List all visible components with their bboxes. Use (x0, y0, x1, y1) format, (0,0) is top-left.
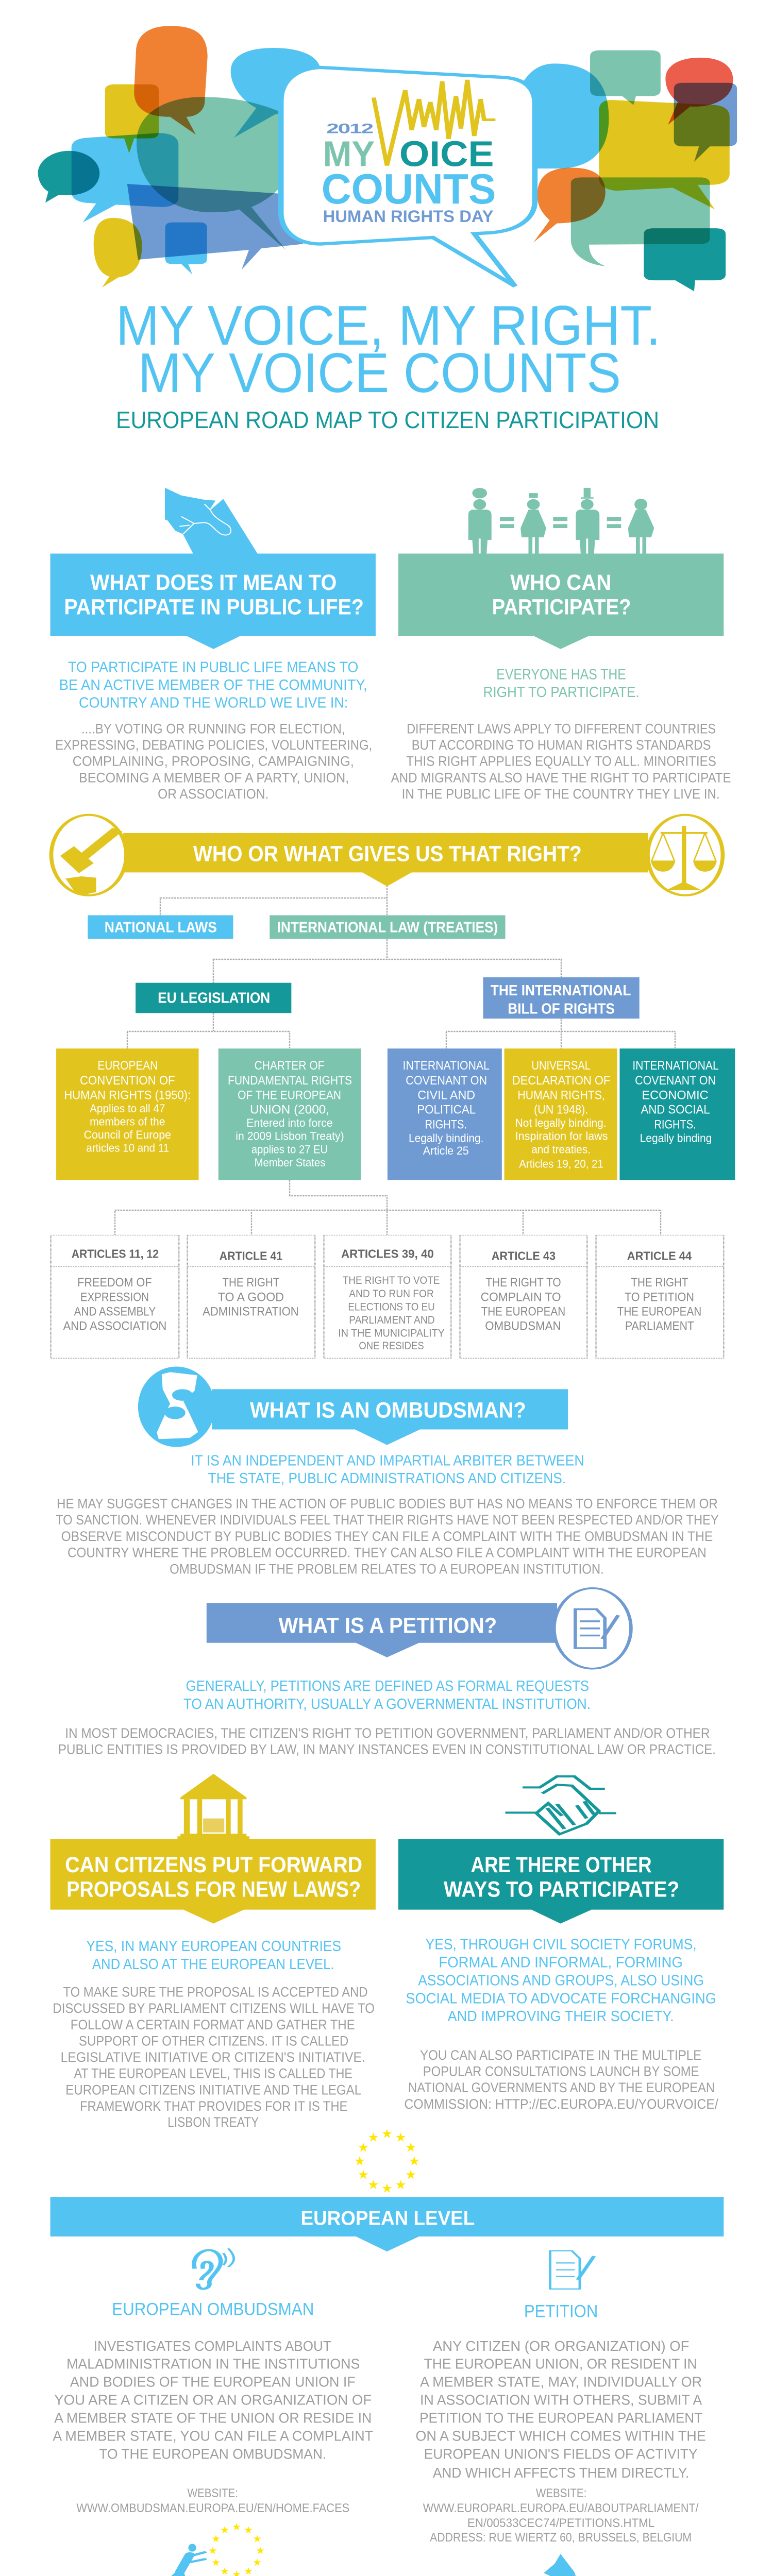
box: EU legislation: EU LEGISLATION (158, 990, 270, 1006)
card: charter of fundamental rights (219, 1048, 361, 1180)
card: charter of fundamental rights: Member States (255, 1156, 325, 1168)
panel: who can participate (391, 488, 731, 802)
card: covenant on economic and social rights (619, 1048, 735, 1180)
body text: ....BY VOTING OR RUNNING FOR ELECTION, (81, 721, 345, 736)
article box: 11, 12: FREEDOM OF (77, 1275, 152, 1289)
section: european level: A MEMBER STATE, YOU CAN FILE A COMPLAINT (53, 2428, 373, 2444)
article box: 43 (460, 1235, 587, 1358)
card: European convention: Council of Europe (84, 1128, 171, 1141)
title: MY VOICE, MY RIGHT. (116, 294, 661, 357)
card: covenant on civil and political rights (388, 1048, 502, 1180)
icon: handshake (506, 1776, 616, 1834)
card: universal declaration: and treaties. (531, 1143, 591, 1156)
section: what is a petition (58, 1588, 716, 1757)
card: European convention (56, 1048, 199, 1180)
heading box: mint (398, 553, 724, 649)
card: charter of fundamental rights: Entered into force (246, 1116, 333, 1129)
card: European convention: CONVENTION OF (80, 1073, 175, 1087)
article box: 39, 40: ONE RESIDES (359, 1340, 424, 1352)
panel: are there other ways to participate (398, 1776, 724, 2112)
article box: 44: TO PETITION (625, 1290, 694, 1304)
body text: AT THE EUROPEAN LEVEL, THIS IS CALLED THE (74, 2066, 352, 2081)
body text (55, 721, 372, 802)
icon: EU stars (355, 2129, 419, 2193)
article box: 44: THE RIGHT (631, 1275, 688, 1289)
box: international bill of rights: THE INTERNATIONAL (491, 982, 631, 999)
card: universal declaration: HUMAN RIGHTS, (517, 1088, 605, 1102)
icon: gavel (51, 815, 126, 895)
body text: BECOMING A MEMBER OF A PARTY, UNION, (79, 770, 349, 785)
logo text: MY: MY (323, 134, 375, 174)
article box: 43: COMPLAIN TO (481, 1290, 561, 1304)
card: European convention: Applies to all 47 (90, 1102, 165, 1115)
article box: 43: THE RIGHT TO (485, 1275, 561, 1289)
main speech bubble (281, 67, 535, 286)
bubble: orange (134, 26, 208, 134)
bubble: sky top (231, 48, 321, 138)
panel: what does it mean to participate (51, 553, 376, 802)
panel: can citizens put forward proposals: AND ALSO AT THE EUROPEAN LEVEL. (92, 1956, 334, 1973)
body text (391, 721, 731, 802)
panel: what does it mean to participate: BE AN ACTIVE MEMBER OF THE COMMUNITY, (59, 676, 367, 693)
box: international law: INTERNATIONAL LAW (TREATIES) (277, 919, 498, 936)
bubble: mint top right (590, 50, 661, 105)
article box: 43: ARTICLE 43 (492, 1249, 556, 1263)
text: ombudsman description: INVESTIGATES COMPLAINTS ABOUT (94, 2337, 331, 2354)
card: covenant on civil and political rights: RIGHTS. (425, 1117, 467, 1131)
article box: 41: TO A GOOD (218, 1290, 284, 1304)
logo text: 2012: 2012 (326, 121, 374, 136)
box: national laws: NATIONAL LAWS (105, 919, 217, 936)
body text: EUROPEAN CITIZENS INITIATIVE AND THE LEGAL (65, 2082, 361, 2097)
article box: 39, 40 (324, 1235, 451, 1358)
icon: petition document (554, 1588, 631, 1669)
banner (51, 2197, 724, 2251)
logo: speech bubbles (38, 26, 737, 291)
article box: 39, 40: IN THE MUNICIPALITY (338, 1327, 445, 1339)
card: covenant on civil and political rights: INTERNATIONAL (403, 1058, 490, 1072)
logo text: OICE: OICE (399, 134, 494, 174)
card: European convention: HUMAN RIGHTS (1950): (64, 1088, 191, 1102)
icon: ombudsman figure (138, 1367, 215, 1447)
section: european level: EUROPEAN OMBUDSMAN (112, 2299, 314, 2319)
card: charter of fundamental rights: in 2009 Lisbon Treaty) (236, 1130, 344, 1142)
card: covenant on civil and political rights: Legally binding. (409, 1131, 483, 1144)
section: european level (51, 2197, 724, 2481)
card: covenant on civil and political rights: CIVIL AND (417, 1088, 475, 1102)
article box: 44: ARTICLE 44 (627, 1249, 692, 1263)
article box: 11, 12: AND ASSEMBLY (74, 1304, 156, 1318)
intro text: TO PARTICIPATE IN PUBLIC LIFE MEANS TO (68, 659, 358, 675)
article box: 41: ADMINISTRATION (203, 1304, 299, 1318)
section: european level: MALADMINISTRATION IN THE INSTITUTIONS (66, 2355, 360, 2372)
panel: can citizens put forward proposals: YES, IN MANY EUROPEAN COUNTRIES (86, 1938, 341, 1955)
article box: 44 (596, 1235, 724, 1358)
website: petition: WEBSITE: (536, 2486, 586, 2500)
body text: FRAMEWORK THAT PROVIDES FOR IT IS THE (80, 2099, 347, 2114)
intro text: COUNTRY AND THE WORLD WE LIVE IN: (79, 694, 348, 711)
box: EU legislation (136, 983, 291, 1013)
article box: 11, 12: EXPRESSION (80, 1290, 149, 1304)
body text (53, 1985, 375, 2130)
heading text: WHO CAN (510, 570, 611, 595)
bubble: yellow small (94, 218, 142, 287)
article boxes (51, 1235, 724, 1358)
heading text (444, 1853, 679, 1902)
icon: ear (194, 2248, 234, 2289)
article box: 43: OMBUDSMAN (485, 1319, 561, 1333)
text: DISCUSSED BY PARLIAMENT CITIZENS WILL HAVE TO (53, 2001, 375, 2016)
card: universal declaration: (UN 1948). (534, 1103, 588, 1116)
body text: SUPPORT OF OTHER CITIZENS. IT IS CALLED (79, 2033, 348, 2048)
panel: can citizens put forward proposals (51, 1774, 376, 2130)
title: MY VOICE COUNTS (138, 342, 621, 404)
panel: what does it mean to participate: PARTICIPATE IN PUBLIC LIFE? (64, 595, 364, 619)
bubble: blue right (674, 83, 737, 162)
article box: 39, 40: AND TO RUN FOR (349, 1287, 434, 1300)
website: petition (423, 2486, 699, 2544)
bubble: yellow right (599, 100, 730, 209)
body text (56, 1496, 719, 1577)
banner (207, 1603, 557, 1657)
icon: equal people (468, 488, 654, 553)
banner (212, 1389, 568, 1445)
card: universal declaration: Articles 19, 20, 21 (519, 1157, 603, 1170)
logo waveform V (374, 80, 495, 165)
article box: 39, 40: ELECTIONS TO EU (348, 1300, 435, 1313)
bubble: red (665, 58, 733, 125)
section: what is an ombudsman (56, 1367, 719, 1577)
section: initiative and consultations (41, 2486, 718, 2576)
article box: 11, 12 (51, 1235, 179, 1358)
heading box: teal (398, 1839, 724, 1924)
article box: 43: THE EUROPEAN (481, 1304, 565, 1318)
website: ombudsman (76, 2486, 349, 2515)
card: universal declaration: UNIVERSAL (531, 1058, 591, 1072)
card: charter of fundamental rights: applies to 27 EU (251, 1143, 328, 1156)
bubble: teal right (644, 228, 726, 291)
body text: OR ASSOCIATION. (158, 787, 268, 802)
article box: 41: ARTICLE 41 (220, 1249, 282, 1263)
bubble: large mint (137, 97, 291, 250)
bubble: sky left (72, 133, 178, 223)
bubble: sky right (523, 63, 609, 168)
card: charter of fundamental rights: FUNDAMENTAL RIGHTS (228, 1073, 352, 1087)
intro text: EVERYONE HAS THE (496, 666, 626, 683)
box: national laws (88, 916, 233, 939)
bubble: yellow left (105, 84, 159, 153)
bubble: blue quad (127, 184, 306, 269)
box: international bill of rights (483, 977, 640, 1019)
article box: 41 (188, 1235, 315, 1358)
intro text (59, 659, 367, 711)
card: European convention: members of the (90, 1115, 165, 1128)
logo text: COUNTS: COUNTS (322, 165, 496, 213)
body text: FOLLOW A CERTAIN FORMAT AND GATHER THE (71, 2017, 355, 2032)
intro text (406, 1936, 716, 2025)
body text: LISBON TREATY (167, 2115, 259, 2130)
section: initiative and consultations: WWW.OMBUDSMAN.EUROPA.EU/EN/HOME.FACES (76, 2501, 349, 2515)
intro text (86, 1938, 341, 1973)
heading text (492, 570, 631, 619)
icon: parliament building (177, 1774, 249, 1839)
section: european level: EUROPEAN LEVEL (301, 2207, 475, 2229)
heading text (65, 1853, 362, 1902)
article box: 39, 40: ARTICLES 39, 40 (341, 1247, 434, 1261)
bubble: orange right (533, 167, 606, 243)
article box: 41: THE RIGHT (222, 1275, 279, 1289)
icon: EU stars small (209, 2523, 264, 2576)
card: charter of fundamental rights: CHARTER OF (255, 1058, 324, 1072)
card: universal declaration (505, 1048, 617, 1180)
heading box: yellow (51, 1839, 376, 1924)
card: universal declaration: Inspiration for laws (515, 1130, 608, 1142)
intro text (483, 666, 640, 701)
connectors: law tree (115, 886, 675, 1235)
subtitle: EUROPEAN ROAD MAP TO CITIZEN PARTICIPATION (116, 406, 659, 433)
bubble: teal circle (38, 151, 99, 202)
card: charter of fundamental rights: UNION (2000, (250, 1103, 329, 1116)
section: european level: YOU ARE A CITIZEN OR AN ORGANIZATION OF (54, 2392, 372, 2408)
text: PROPOSALS FOR NEW LAWS? (66, 1877, 361, 1902)
icon: person pushing stars (165, 2544, 205, 2576)
box: international bill of rights: BILL OF RIGHTS (508, 1001, 615, 1017)
heading box: blue (51, 553, 376, 649)
section: european level: A MEMBER STATE OF THE UNION OR RESIDE IN (54, 2410, 372, 2426)
card: covenant on economic and social rights: ECONOMIC (642, 1088, 709, 1102)
bubble: mint right (571, 177, 710, 266)
card: charter of fundamental rights: OF THE EUROPEAN (238, 1088, 341, 1102)
logo text: HUMAN RIGHTS DAY: HUMAN RIGHTS DAY (323, 208, 494, 226)
law tree (56, 916, 735, 1180)
bubble: sky small (165, 223, 207, 275)
card: European convention: articles 10 and 11 (86, 1142, 169, 1154)
text: ombudsman description (53, 2337, 373, 2462)
text: ombudsman description: TO THE EUROPEAN OMBUDSMAN. (99, 2446, 326, 2462)
box: international law (270, 916, 506, 939)
intro text (183, 1677, 591, 1712)
text: EXPRESSING, DEBATING POLICIES, VOLUNTEERING, (55, 738, 372, 753)
card: European convention: EUROPEAN (97, 1058, 158, 1072)
card: universal declaration: DECLARATION OF (512, 1073, 610, 1087)
article box: 44: PARLIAMENT (625, 1319, 694, 1333)
body text: LEGISLATIVE INITIATIVE OR CITIZEN'S INITIATIVE. (61, 2050, 365, 2065)
icon: hand casting vote (165, 488, 258, 554)
article box: 39, 40: PARLIAMENT AND (349, 1314, 435, 1326)
body text (404, 2048, 718, 2112)
section: what is a petition: WHAT IS A PETITION? (278, 1613, 497, 1638)
banner: who or what gives us that right (51, 815, 722, 895)
intro text (191, 1452, 584, 1487)
body text: COMPLAINING, PROPOSING, CAMPAIGNING, (73, 754, 354, 769)
icon: document with pen (550, 2251, 594, 2289)
section: european level: AND BODIES OF THE EUROPEAN UNION IF (70, 2374, 356, 2390)
article box: 11, 12: ARTICLES 11, 12 (72, 1247, 159, 1261)
icon: megaphone (544, 2554, 578, 2576)
article box: 11, 12: AND ASSOCIATION (63, 1319, 166, 1333)
card: covenant on civil and political rights: COVENANT ON (406, 1073, 487, 1087)
title (116, 294, 661, 404)
card: covenant on economic and social rights: RIGHTS. (654, 1117, 696, 1131)
website: ombudsman: WEBSITE: (188, 2486, 238, 2500)
section: european level: PETITION (524, 2301, 598, 2321)
heading text: WHAT DOES IT MEAN TO (90, 570, 337, 595)
banner bar (123, 833, 648, 886)
icon: scales (648, 815, 722, 895)
body text (58, 1726, 716, 1757)
card: covenant on civil and political rights: POLITICAL (417, 1103, 476, 1116)
text: petition description (415, 2337, 706, 2481)
text: TO MAKE SURE THE PROPOSAL IS ACCEPTED AND (63, 1985, 368, 1999)
panel: can citizens put forward proposals: CAN CITIZENS PUT FORWARD (65, 1853, 362, 1877)
heading text (64, 570, 364, 619)
article box: 39, 40: THE RIGHT TO VOTE (343, 1274, 440, 1286)
card: covenant on civil and political rights: Article 25 (423, 1144, 469, 1157)
card: universal declaration: Not legally binding. (515, 1116, 607, 1129)
